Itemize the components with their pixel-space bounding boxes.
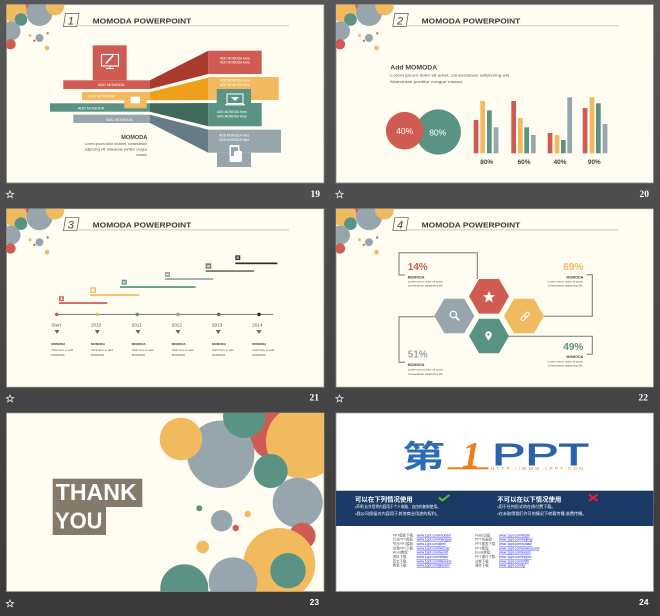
footer: slide 22: 22: [638, 394, 648, 404]
corner circles: [2, 0, 64, 50]
link list: www.1ppt.com/powerpoint/: [499, 546, 540, 550]
timeline columns: MOMODA: [212, 353, 225, 357]
link list: Word教程:: [393, 550, 409, 555]
callout: 51%: Lorem ipsum dolor sit amet,: [408, 368, 444, 372]
navy band: •我公司保留对内容用于其他商业用途的权利。: [355, 511, 440, 516]
callout: 51%: MOMODA: [408, 363, 425, 367]
link list: 节日PPT模板:: [393, 541, 414, 546]
icon: check mark: [439, 495, 449, 500]
text block: MOMODA: [121, 135, 147, 141]
text block: massa.: [136, 153, 147, 157]
callout: 14%: MOMODA: [408, 275, 425, 279]
link list: www.1ppt.com/beijing/: [499, 538, 533, 542]
navy band: 可以在下列情况使用: [355, 494, 413, 503]
bar chart: 60%: [518, 159, 531, 166]
icon: laptop: [225, 94, 245, 105]
link list: www.1ppt.com/kj/: [499, 564, 525, 568]
icon: red cross: [589, 494, 598, 501]
thank you label: THANK: [56, 479, 137, 505]
timeline columns: 2011: [132, 322, 142, 328]
icon: phone in hand: [230, 145, 242, 162]
hexagon: link: [504, 299, 544, 333]
link list: PPT课件下载:: [475, 554, 496, 559]
logo: HTTP://WWW.1PPT.COM: [491, 466, 583, 471]
timeline columns: 2012: [172, 322, 182, 328]
link list: PPT图表下载:: [475, 541, 496, 546]
navy band: [336, 491, 654, 526]
slide heading: 3: [68, 220, 75, 232]
overlapping circles: 40%: [396, 126, 414, 136]
callout: 49%: [548, 342, 584, 368]
link list: [393, 532, 540, 568]
right blocks: ADD MOMODA Here: [220, 61, 250, 65]
navy band: •用于任何形式的在线付费下载。: [497, 504, 555, 509]
callout: 51%: consectetuer adipiscing elit.: [408, 372, 443, 376]
footer: slide 22: [336, 394, 648, 404]
left bars: ADD MOMODA: [106, 118, 133, 122]
timeline columns: [51, 322, 274, 357]
ascending steps: [59, 255, 277, 304]
bar chart: 90%: [588, 159, 601, 166]
right blocks: ADD MOMODA Here: [219, 133, 249, 137]
link list: PPT教程:: [475, 545, 489, 550]
timeline columns: Click here to add: [132, 348, 154, 352]
link list: www.1ppt.com/word/: [417, 551, 448, 555]
left bars: ADD MOMODA: [88, 95, 115, 99]
slide heading: [64, 218, 289, 232]
text block: [390, 64, 510, 84]
text block: Maecenas porttitor congue massa.: [390, 80, 463, 84]
timeline columns: MOMODA: [51, 342, 66, 346]
footer: slide 19: 19: [310, 190, 320, 200]
timeline columns: 2014: [252, 322, 263, 328]
logo: [402, 436, 589, 476]
slide heading: 2: [396, 15, 403, 27]
panel: slide 22 hexagons: [331, 201, 654, 387]
panel: slide 21 timeline: [2, 201, 324, 387]
link list: www.1ppt.com/jiaoan/: [417, 564, 450, 568]
callout: 14%: Lorem ipsum dolor sit amet,: [408, 280, 444, 284]
timeline columns: MOMODA: [252, 353, 266, 357]
link list: 优秀PPT下载:: [393, 545, 414, 550]
link list: 教案下载:: [393, 563, 407, 568]
callout: 14%: 14%: [408, 262, 428, 273]
right blocks: ADD MOMODA Here: [217, 114, 247, 118]
slide heading: MOMODA POWERPOINT: [93, 221, 192, 230]
link list: 课件下载:: [475, 563, 490, 568]
navy band: •声明:允许您将内容用于个人电脑、自由的复制使用。: [355, 504, 441, 509]
footer: slide 21: 21: [310, 394, 319, 404]
link list: www.1ppt.com/moban/: [417, 533, 451, 537]
callout: 14%: consectetuer adipiscing elit.: [408, 284, 443, 288]
link list: 范文下载:: [393, 558, 407, 563]
link list: 资料下载:: [393, 554, 407, 559]
link list: PPT背景图:: [475, 537, 493, 542]
link list: 试卷下载:: [475, 558, 490, 563]
logo: 1: [462, 436, 480, 476]
left bars: ADD MOMODA: [78, 106, 105, 110]
bar chart: 80%: [480, 159, 493, 166]
link list: www.1ppt.com/hangye/: [417, 538, 452, 542]
link list: Excel教程:: [475, 550, 491, 555]
callout: 49%: MOMODA: [567, 355, 584, 359]
link list: www.1ppt.com/flash/: [499, 533, 530, 537]
timeline columns: 2013: [212, 322, 223, 328]
timeline columns: MOMODA: [132, 342, 147, 346]
panel: slide 20 charts: [331, 0, 654, 183]
link list: Flash动画:: [475, 532, 491, 537]
link list: www.1ppt.com/xiazai/: [417, 546, 449, 550]
link list: 行业PPT模板:: [393, 537, 414, 542]
link list: www.1ppt.com/tubiao/: [499, 542, 532, 546]
timeline columns: MOMODA: [252, 342, 267, 346]
callout: 49%: consectetuer adipiscing elit.: [548, 364, 583, 368]
timeline columns: Start: [51, 322, 62, 328]
callout: 14%: [408, 262, 444, 288]
panel: slide 19 funnel diagram: [2, 0, 324, 183]
text block: Add MOMODA: [390, 64, 437, 71]
timeline columns: MOMODA: [172, 342, 187, 346]
right blocks: ADD MOMODA Here: [217, 110, 247, 114]
text block: Lorem ipsum dolor sit amet, consectetuer: [85, 142, 148, 146]
footer: slide 20: [336, 190, 649, 200]
callout: 69%: MOMODA: [567, 275, 584, 279]
slide heading: MOMODA POWERPOINT: [93, 16, 192, 26]
right blocks: ADD MOMODA Here: [220, 57, 250, 61]
right blocks: ADD MOMODA Here: [219, 138, 249, 142]
footer: slide 23: [6, 597, 319, 607]
logo: PPT: [492, 437, 589, 472]
link list: www.1ppt.com/ziliao/: [417, 555, 448, 559]
timeline columns: Click here to add: [212, 348, 234, 352]
page number: slide 24: 24: [639, 597, 649, 607]
slide heading: MOMODA POWERPOINT: [422, 16, 521, 26]
link list: www.1ppt.com/shiti/: [499, 559, 529, 563]
logo: 第: [402, 440, 445, 474]
right blocks: [208, 51, 281, 167]
right blocks: ADD MOMODA Here: [220, 79, 250, 83]
callout: 51%: [408, 350, 444, 376]
link list: www.1ppt.com/fanwen/: [417, 559, 452, 563]
link list: www.1ppt.com/jieri/: [417, 542, 446, 546]
callout: 69%: [548, 262, 584, 288]
timeline columns: MOMODA: [51, 353, 65, 357]
timeline axis: [55, 313, 273, 316]
thank you label: YOU: [55, 507, 102, 533]
link list: www.1ppt.com/kejian/: [499, 555, 532, 559]
slide heading: [393, 218, 618, 232]
timeline columns: MOMODA: [172, 353, 185, 357]
slide heading: [393, 14, 618, 27]
icon: monitor with pen: [102, 54, 118, 68]
text block: [85, 135, 148, 157]
timeline columns: MOMODA: [91, 342, 106, 346]
footer: slide 23: 23: [310, 597, 319, 607]
panel: slide 24 terms: [336, 413, 654, 592]
timeline columns: Click here to add: [252, 348, 274, 352]
text block: Lorem ipsum dolor sit amet, consectetuer adipiscing elit.: [390, 74, 510, 78]
corner circles: [331, 0, 394, 50]
navy band: 不可以在以下情况使用: [497, 494, 561, 503]
timeline columns: Click here to add: [172, 348, 194, 352]
hexagon: location pin: [469, 319, 509, 353]
slide heading: 4: [397, 220, 403, 232]
callout: 69%: 69%: [563, 262, 583, 273]
hexagon: search: [434, 299, 474, 333]
callout: 69%: consectetuer adipiscing elit.: [548, 284, 583, 288]
slide heading: [64, 14, 289, 27]
connector lines: [399, 253, 592, 362]
overlapping circles: 80%: [429, 128, 447, 138]
callout: 49%: Lorem ipsum dolor sit amet,: [548, 359, 583, 363]
left bars: ADD MOMODA: [98, 83, 125, 87]
left bars: [50, 45, 150, 123]
callout: 51%: 51%: [408, 350, 428, 361]
panel: slide 23 thank you: [6, 412, 324, 592]
hexagon: star: [469, 279, 509, 314]
timeline columns: MOMODA: [212, 342, 227, 346]
navy band: •在未取得我们许可的情况下转载传播,收费传播。: [497, 511, 586, 516]
timeline columns: 2010: [91, 322, 102, 328]
corner circles: [2, 201, 64, 254]
callout: 49%: 49%: [563, 342, 583, 353]
footer: slide 20: 20: [640, 190, 649, 200]
timeline columns: Click here to add: [51, 348, 73, 352]
footer: slide 21: [6, 394, 319, 404]
bar chart: 40%: [554, 159, 567, 166]
link list: PPT模板下载:: [393, 532, 414, 537]
corner circles: [331, 201, 394, 254]
circle cluster: [160, 413, 324, 592]
icon: envelope: [131, 97, 140, 103]
timeline columns: Click here to add: [91, 348, 113, 352]
text block: adipiscing elit. Maecenas porttitor congue: [85, 148, 147, 152]
perspective connectors: [150, 51, 208, 153]
slide heading: 1: [68, 15, 74, 27]
overlapping circles: [386, 109, 461, 155]
callout: 69%: Lorem ipsum dolor sit amet,: [548, 280, 583, 284]
right blocks: ADD MOMODA Here: [220, 83, 250, 87]
bar chart: [474, 97, 607, 166]
timeline columns: MOMODA: [132, 353, 145, 357]
timeline columns: MOMODA: [91, 353, 104, 357]
footer: slide 19: [6, 190, 320, 200]
slide heading: MOMODA POWERPOINT: [422, 221, 521, 230]
thank you label: [53, 479, 142, 535]
link list: www.1ppt.com/excel/: [499, 551, 531, 555]
